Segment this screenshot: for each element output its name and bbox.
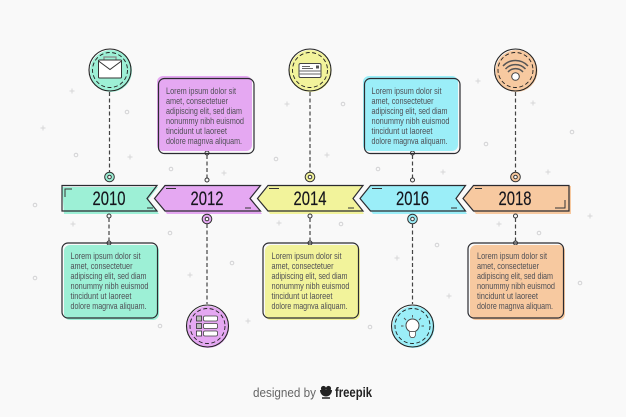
panel: 2012 text: dolore magnva aliquam. bbox=[166, 135, 242, 146]
panel: 2010 text bbox=[62, 243, 159, 320]
panel: 2012 text: amet, consectetuer bbox=[166, 95, 228, 106]
connector: 2010 callout bbox=[107, 214, 111, 245]
banner: 2018: 2018 bbox=[498, 189, 532, 210]
panel: 2010 text: adipiscing elit, sed diam bbox=[70, 270, 147, 281]
footer: designed by freepik: designed by bbox=[253, 386, 317, 400]
connector: 2018 callout bbox=[514, 214, 518, 245]
panel: 2016 text: nonummy nibh euismod bbox=[372, 115, 450, 126]
panel: 2010 text: nonummy nibh euismod bbox=[70, 280, 148, 291]
panel: 2014 text: Lorem ipsum dolor sit bbox=[272, 250, 342, 261]
panel: 2010 text: tincidunt ut laoreet bbox=[70, 290, 132, 301]
panel: 2012 text bbox=[157, 76, 254, 154]
icon: checklist bbox=[186, 305, 229, 348]
panel: 2018 text: nonummy nibh euismod bbox=[477, 280, 555, 291]
icon: light bulb bbox=[392, 305, 434, 348]
connector: 2016 bbox=[408, 214, 417, 304]
panel: 2014 text: tincidunt ut laoreet bbox=[272, 290, 333, 301]
banner: 2014: 2014 bbox=[294, 189, 327, 210]
panel: 2016 text: adipiscing elit, sed diam bbox=[372, 105, 448, 116]
panel: 2010 text: Lorem ipsum dolor sit bbox=[70, 250, 141, 261]
connector: 2012 bbox=[202, 214, 212, 304]
banner: 2014 bbox=[258, 186, 364, 214]
panel: 2016 text: amet, consectetuer bbox=[372, 95, 434, 106]
panel: 2010 text: dolore magnva aliquam. bbox=[70, 300, 146, 311]
footer: designed by freepik: freepik bbox=[335, 384, 372, 400]
panel: 2018 text bbox=[468, 243, 565, 320]
panel: 2014 text bbox=[263, 243, 360, 320]
panel: 2016 text: tincidunt ut laoreet bbox=[372, 125, 433, 136]
connector: 2014 callout bbox=[308, 214, 312, 245]
banner: 2012: 2012 bbox=[190, 189, 224, 210]
panel: 2016 text: Lorem ipsum dolor sit bbox=[372, 85, 442, 96]
panel: 2018 text: adipiscing elit, sed diam bbox=[477, 270, 553, 281]
panel: 2014 text: nonummy nibh euismod bbox=[272, 280, 350, 291]
panel: 2018 text: dolore magnva aliquam. bbox=[477, 300, 553, 311]
connector: 2010 bbox=[105, 92, 114, 182]
connector: 2016 callout bbox=[410, 151, 414, 182]
icon: wifi bbox=[494, 49, 538, 92]
banner: 2016 bbox=[360, 186, 467, 214]
panel: 2012 text: nonummy nibh euismod bbox=[166, 115, 244, 126]
panel: 2018 text: tincidunt ut laoreet bbox=[477, 290, 538, 301]
banner: 2016: 2016 bbox=[396, 189, 429, 210]
icon: briefcase envelope bbox=[89, 49, 132, 92]
connector: 2018 bbox=[511, 92, 520, 182]
banner: 2010: 2010 bbox=[92, 189, 126, 210]
panel: 2014 text: adipiscing elit, sed diam bbox=[272, 270, 348, 281]
panel: 2010 text: amet, consectetuer bbox=[70, 260, 132, 271]
connector: 2012 callout bbox=[205, 151, 209, 182]
panel: 2014 text: amet, consectetuer bbox=[272, 260, 334, 271]
banner: 2018 bbox=[463, 186, 571, 214]
footer: designed by freepik bbox=[253, 384, 372, 400]
panel: 2018 text: Lorem ipsum dolor sit bbox=[477, 250, 547, 261]
banner: 2012 bbox=[154, 186, 262, 214]
panel: 2012 text: Lorem ipsum dolor sit bbox=[166, 85, 236, 96]
panel: 2012 text: adipiscing elit, sed diam bbox=[166, 105, 242, 116]
panel: 2016 text: dolore magnva aliquam. bbox=[372, 135, 448, 146]
panel: 2012 text: tincidunt ut laoreet bbox=[166, 125, 227, 136]
panel: 2014 text: dolore magnva aliquam. bbox=[272, 300, 348, 311]
connector: 2014 bbox=[305, 92, 315, 182]
panel: 2016 text bbox=[363, 76, 460, 154]
icon: credit card bbox=[289, 49, 332, 92]
panel: 2018 text: amet, consectetuer bbox=[477, 260, 539, 271]
banner: 2010 bbox=[62, 186, 159, 214]
